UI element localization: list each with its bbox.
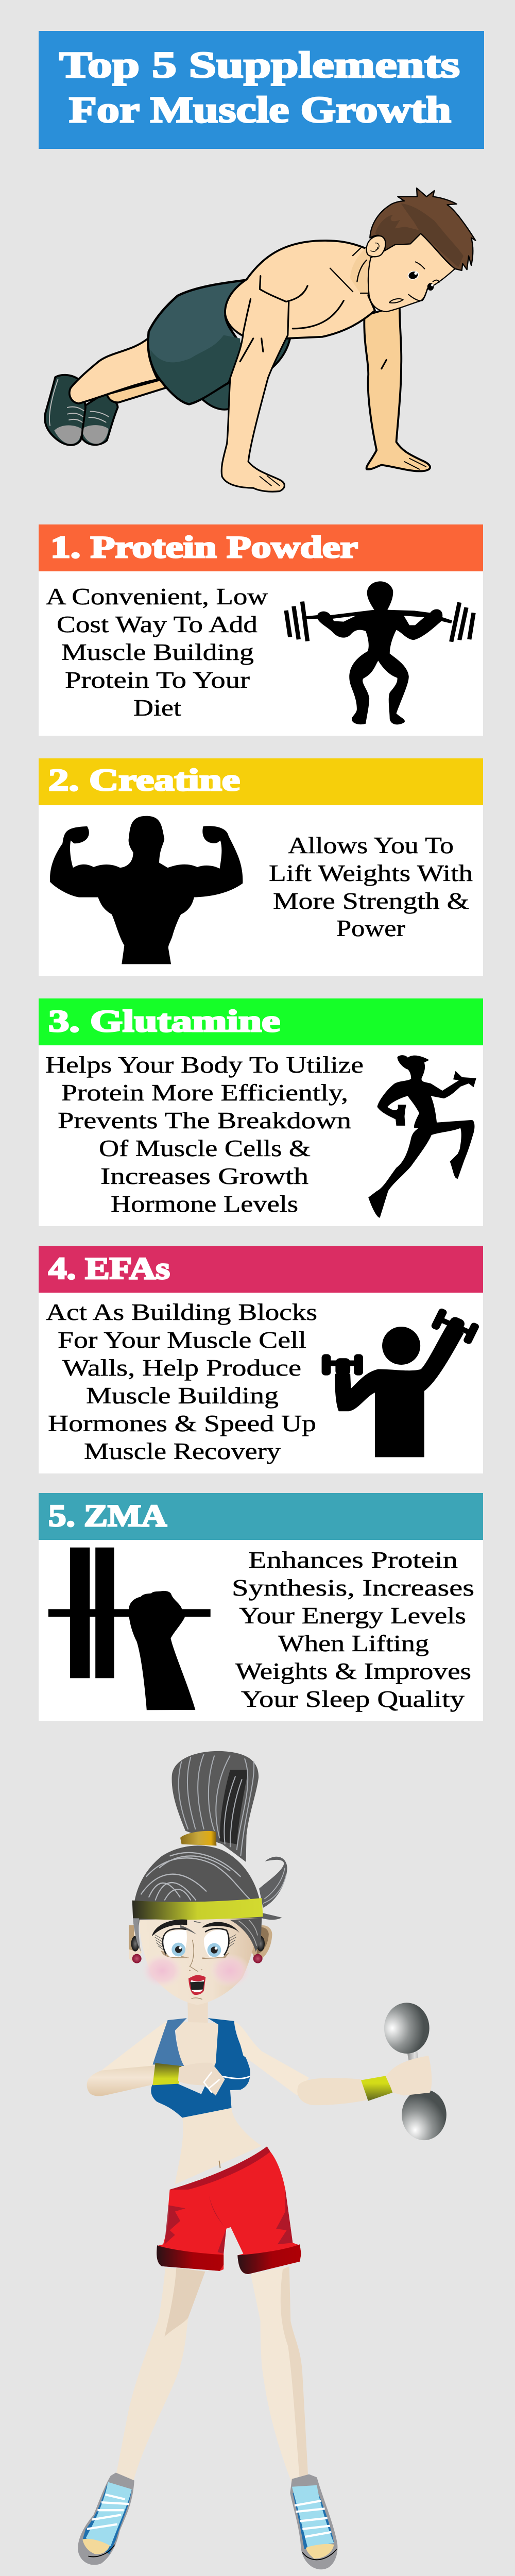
face xyxy=(140,1917,261,2005)
neck and chest lines xyxy=(330,248,368,293)
neck xyxy=(187,1995,208,2023)
creatine description text: Lift Weights With xyxy=(269,860,473,886)
EFAs panel body xyxy=(39,1293,483,1473)
hair strands xyxy=(179,1754,254,1856)
far leg xyxy=(107,380,166,402)
ZMA description text: Synthesis, Increases xyxy=(232,1575,474,1601)
finger lines xyxy=(260,459,426,486)
protein description text xyxy=(46,584,268,721)
right upper arm xyxy=(234,2022,309,2096)
protein panel header xyxy=(39,524,483,571)
hair shading xyxy=(375,204,464,267)
blush xyxy=(142,1954,183,1988)
EFAs description text xyxy=(46,1299,317,1464)
eyebrows xyxy=(152,1920,239,1936)
protein description text: Cost Way To Add xyxy=(57,612,258,637)
glutamine description text: Protein More Efficiently, xyxy=(61,1080,348,1106)
ZMA description text: Your Sleep Quality xyxy=(241,1686,465,1712)
panel: creatine xyxy=(39,758,483,976)
protein description text: Muscle Building xyxy=(61,639,254,665)
woman legs and shoes xyxy=(78,2266,337,2569)
shoe details xyxy=(49,380,109,426)
panel: ZMA xyxy=(39,1493,483,1721)
protein description text: Diet xyxy=(133,695,182,721)
ZMA description text: When Lifting xyxy=(278,1631,429,1656)
creatine description text: Allows You To xyxy=(288,833,454,858)
far arm xyxy=(364,306,430,471)
near leg xyxy=(70,338,158,403)
ear xyxy=(367,236,386,257)
gauge earrings xyxy=(131,1936,140,1952)
left upper arm xyxy=(101,2021,175,2071)
panel: protein powder: 1. Protein Powder xyxy=(50,530,358,564)
panel: EFAs xyxy=(39,1246,483,1473)
near eye xyxy=(407,269,420,281)
far shorts xyxy=(201,338,290,410)
ears, gauges and face xyxy=(129,1917,272,2005)
panel: creatine: 2. Creatine xyxy=(48,763,240,797)
bra right xyxy=(151,2018,250,2118)
left shoe xyxy=(78,2472,134,2565)
panel: ZMA: 5. ZMA xyxy=(48,1499,167,1533)
panel: protein powder xyxy=(39,524,483,736)
right leg xyxy=(251,2266,308,2487)
mouth xyxy=(188,1975,205,1995)
creatine description text xyxy=(269,833,473,941)
panel: glutamine xyxy=(39,998,483,1226)
protein description text: Protein To Your xyxy=(65,667,250,693)
EFAs panel header xyxy=(39,1246,483,1293)
glutamine description text: Hormone Levels xyxy=(111,1191,298,1217)
EFAs description text: Muscle Building xyxy=(86,1383,279,1409)
illustration: man doing push-up xyxy=(45,188,475,492)
ponytail wisps xyxy=(259,1857,287,1920)
rear shoe xyxy=(81,393,118,445)
eye sockets xyxy=(161,1951,229,1959)
left leg shading xyxy=(164,2268,205,2336)
side hair xyxy=(230,1918,262,1952)
woman shorts xyxy=(157,2190,301,2274)
nose xyxy=(189,1940,202,1999)
glutamine panel header xyxy=(39,998,483,1045)
torso xyxy=(225,241,375,338)
near arm xyxy=(221,283,290,492)
dumbbell xyxy=(384,2003,447,2140)
ZMA description text: Your Energy Levels xyxy=(239,1603,466,1629)
glutamine description text: Of Muscle Cells & xyxy=(99,1136,311,1161)
facial features xyxy=(133,1918,262,1999)
right wristband xyxy=(361,2076,392,2101)
hair dark inner xyxy=(220,1770,248,1844)
creatine description text: More Strength & xyxy=(273,888,469,914)
creatine panel body xyxy=(39,805,483,976)
protein description text: A Convenient, Low xyxy=(46,584,268,609)
creatine description text: Power xyxy=(336,916,405,941)
face xyxy=(368,233,455,312)
title banner xyxy=(39,31,484,149)
right shoe xyxy=(290,2474,337,2569)
left wristband xyxy=(152,2063,182,2085)
icon: flexing bodybuilder xyxy=(50,816,243,964)
shorts cuffs xyxy=(157,2245,224,2271)
ZMA panel body xyxy=(39,1540,483,1721)
glutamine description text: Helps Your Body To Utilize xyxy=(45,1052,364,1078)
title banner: For Muscle Growth xyxy=(69,89,451,130)
brow wisp xyxy=(180,1921,204,1935)
ZMA panel header xyxy=(39,1493,483,1540)
panel: EFAs: 4. EFAs xyxy=(48,1251,170,1285)
waist xyxy=(175,2108,262,2184)
ZMA description text xyxy=(232,1547,474,1712)
woman upper body and head xyxy=(87,1751,447,2190)
icon: person lifting dumbbells xyxy=(322,1308,480,1457)
EFAs description text: For Your Muscle Cell xyxy=(58,1327,306,1353)
ZMA description text: Enhances Protein xyxy=(248,1547,458,1573)
protein panel body xyxy=(39,571,483,736)
right leg shading xyxy=(281,2266,308,2481)
main hair xyxy=(133,1845,263,1939)
left forearm xyxy=(87,2065,156,2096)
rear shoe sole xyxy=(82,425,109,444)
right hand xyxy=(386,2056,432,2096)
bra left xyxy=(152,2018,187,2066)
icon: woman running with dumbbells xyxy=(368,1055,476,1218)
far eye xyxy=(427,283,434,291)
shorts shading xyxy=(164,2190,293,2253)
EFAs description text: Muscle Recovery xyxy=(84,1438,281,1464)
glutamine description text: Increases Growth xyxy=(100,1163,308,1189)
glutamine description text: Prevents The Breakdown xyxy=(58,1108,351,1133)
chest xyxy=(175,2022,220,2071)
front shoe xyxy=(45,375,85,445)
shorts waistband xyxy=(170,2146,285,2190)
EFAs description text: Walls, Help Produce xyxy=(62,1355,301,1381)
glutamine description text xyxy=(45,1052,364,1217)
left hand xyxy=(178,2063,225,2096)
shorts xyxy=(148,280,247,404)
navel xyxy=(219,2161,220,2168)
ZMA description text: Weights & Improves xyxy=(235,1658,471,1684)
drop earrings xyxy=(132,1954,142,1963)
ears xyxy=(129,1925,142,1962)
glutamine panel body xyxy=(39,1045,483,1226)
EFAs description text: Hormones & Speed Up xyxy=(48,1411,316,1436)
main hair strands xyxy=(141,1853,251,1901)
right forearm xyxy=(297,2078,367,2105)
icon: fist gripping barbell xyxy=(48,1548,211,1710)
EFAs description text: Act As Building Blocks xyxy=(46,1299,317,1325)
front shoe sole xyxy=(54,426,81,444)
shorts shading xyxy=(150,335,241,403)
man head xyxy=(330,188,475,312)
irises xyxy=(171,1943,185,1956)
eye whites xyxy=(162,1930,187,1957)
arm and muscle outlines xyxy=(221,276,386,492)
panel: glutamine: 3. Glutamine xyxy=(48,1004,280,1038)
creatine panel header xyxy=(39,758,483,805)
hair xyxy=(370,188,475,270)
eye outlines xyxy=(163,1928,229,1955)
title banner: Top 5 Supplements xyxy=(59,44,460,86)
upper hair xyxy=(172,1751,259,1862)
headband xyxy=(132,1898,263,1920)
left leg xyxy=(116,2268,205,2484)
illustration: woman with dumbbell xyxy=(78,1751,447,2569)
icon: weightlifter squatting xyxy=(286,581,474,724)
eye lashes xyxy=(154,1935,236,1950)
brows, nose and mouth xyxy=(389,262,439,303)
neck shading xyxy=(350,248,372,294)
hair tie xyxy=(180,1831,216,1845)
